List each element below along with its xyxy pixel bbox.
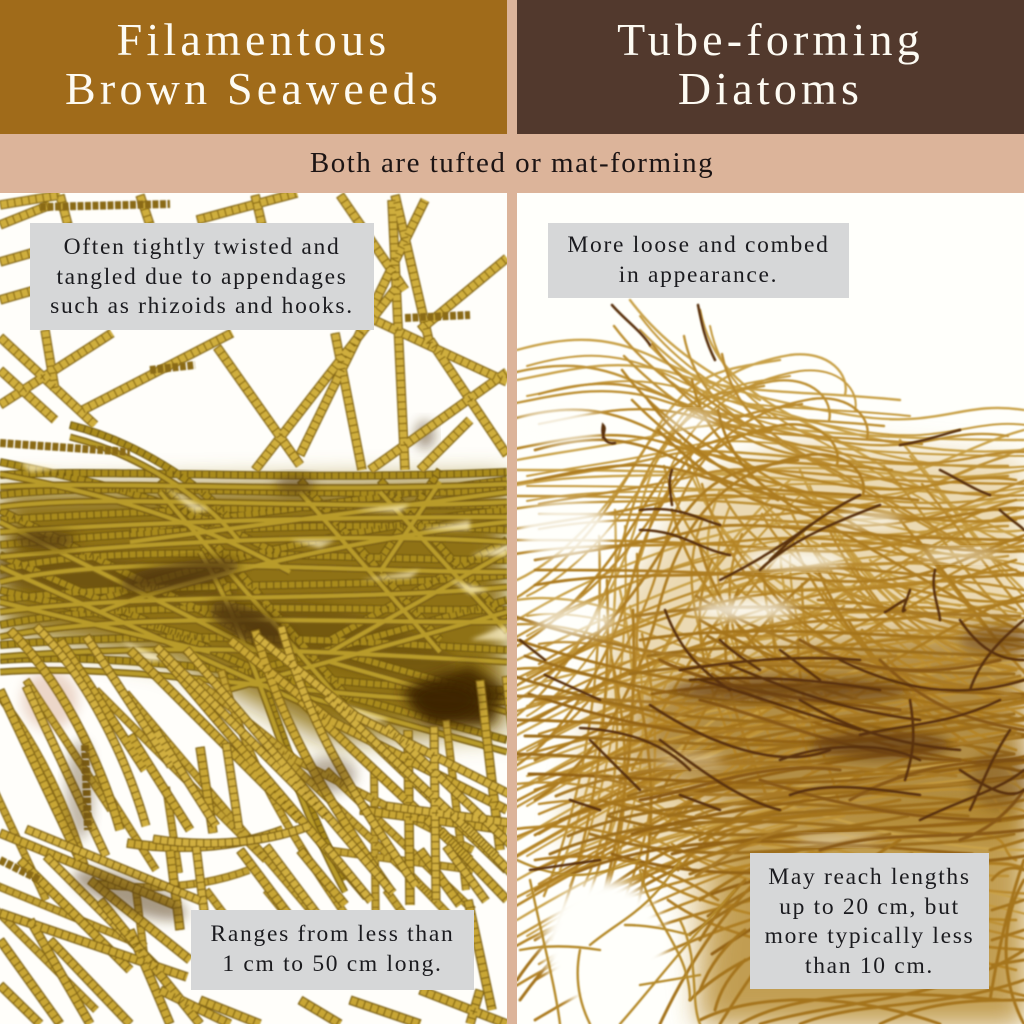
header: filamentous brown seaweeds: Filamentous [117, 14, 390, 65]
photo: tube-forming diatom micrograph [517, 193, 1024, 1024]
callout: loose and combed: More loose and combed [567, 232, 830, 258]
callout: seaweed length: 1 cm to 50 cm long. [222, 950, 443, 976]
header: tube-forming diatoms [517, 0, 1024, 134]
header: tube-forming diatoms: Tube-forming [617, 14, 924, 65]
bright gaps within mat [20, 462, 507, 722]
filaments: pale strands [501, 300, 1024, 1024]
dark brown strands [640, 640, 1024, 850]
callout: diatom length: up to 20 cm, but [779, 894, 960, 920]
filaments: jointed strands [0, 193, 533, 1024]
callout: loose and combed [548, 223, 849, 298]
dark mass [670, 626, 1024, 810]
white gaps [518, 407, 1000, 1011]
callout: diatom length [750, 853, 989, 989]
shared trait banner: Both are tufted or mat-forming [310, 147, 714, 179]
background [0, 193, 507, 1024]
dark tips and clusters [520, 305, 1024, 870]
header: filamentous brown seaweeds: Brown Seaweeds [65, 63, 442, 114]
filaments: mat strands [0, 425, 507, 892]
callout: twisted and tangled [30, 223, 374, 330]
dark tangles [13, 421, 507, 725]
callout: seaweed length [191, 910, 474, 990]
callout: loose and combed: in appearance. [619, 262, 778, 288]
callout: seaweed length: Ranges from less than [211, 921, 454, 947]
beaded strands [0, 204, 470, 880]
callout: diatom length: May reach lengths [768, 864, 971, 890]
callout: twisted and tangled: such as rhizoids and hooks. [50, 293, 354, 319]
sparse strands over the white patch [517, 860, 735, 1024]
callout: twisted and tangled: tangled due to appendages [56, 264, 348, 290]
callout: twisted and tangled: Often tightly twisted and [64, 234, 340, 260]
header: filamentous brown seaweeds [0, 0, 507, 134]
header: tube-forming diatoms: Diatoms [678, 63, 863, 114]
soft tone: tuft body [560, 440, 1024, 1024]
callout: diatom length: than 10 cm. [805, 952, 934, 978]
background [517, 193, 1024, 1024]
callout: diatom length: more typically less [765, 923, 974, 949]
soft tone: dense mat [0, 480, 507, 740]
dark tangles over strands [66, 682, 479, 931]
photo: filamentous brown seaweed micrograph [0, 193, 507, 1024]
